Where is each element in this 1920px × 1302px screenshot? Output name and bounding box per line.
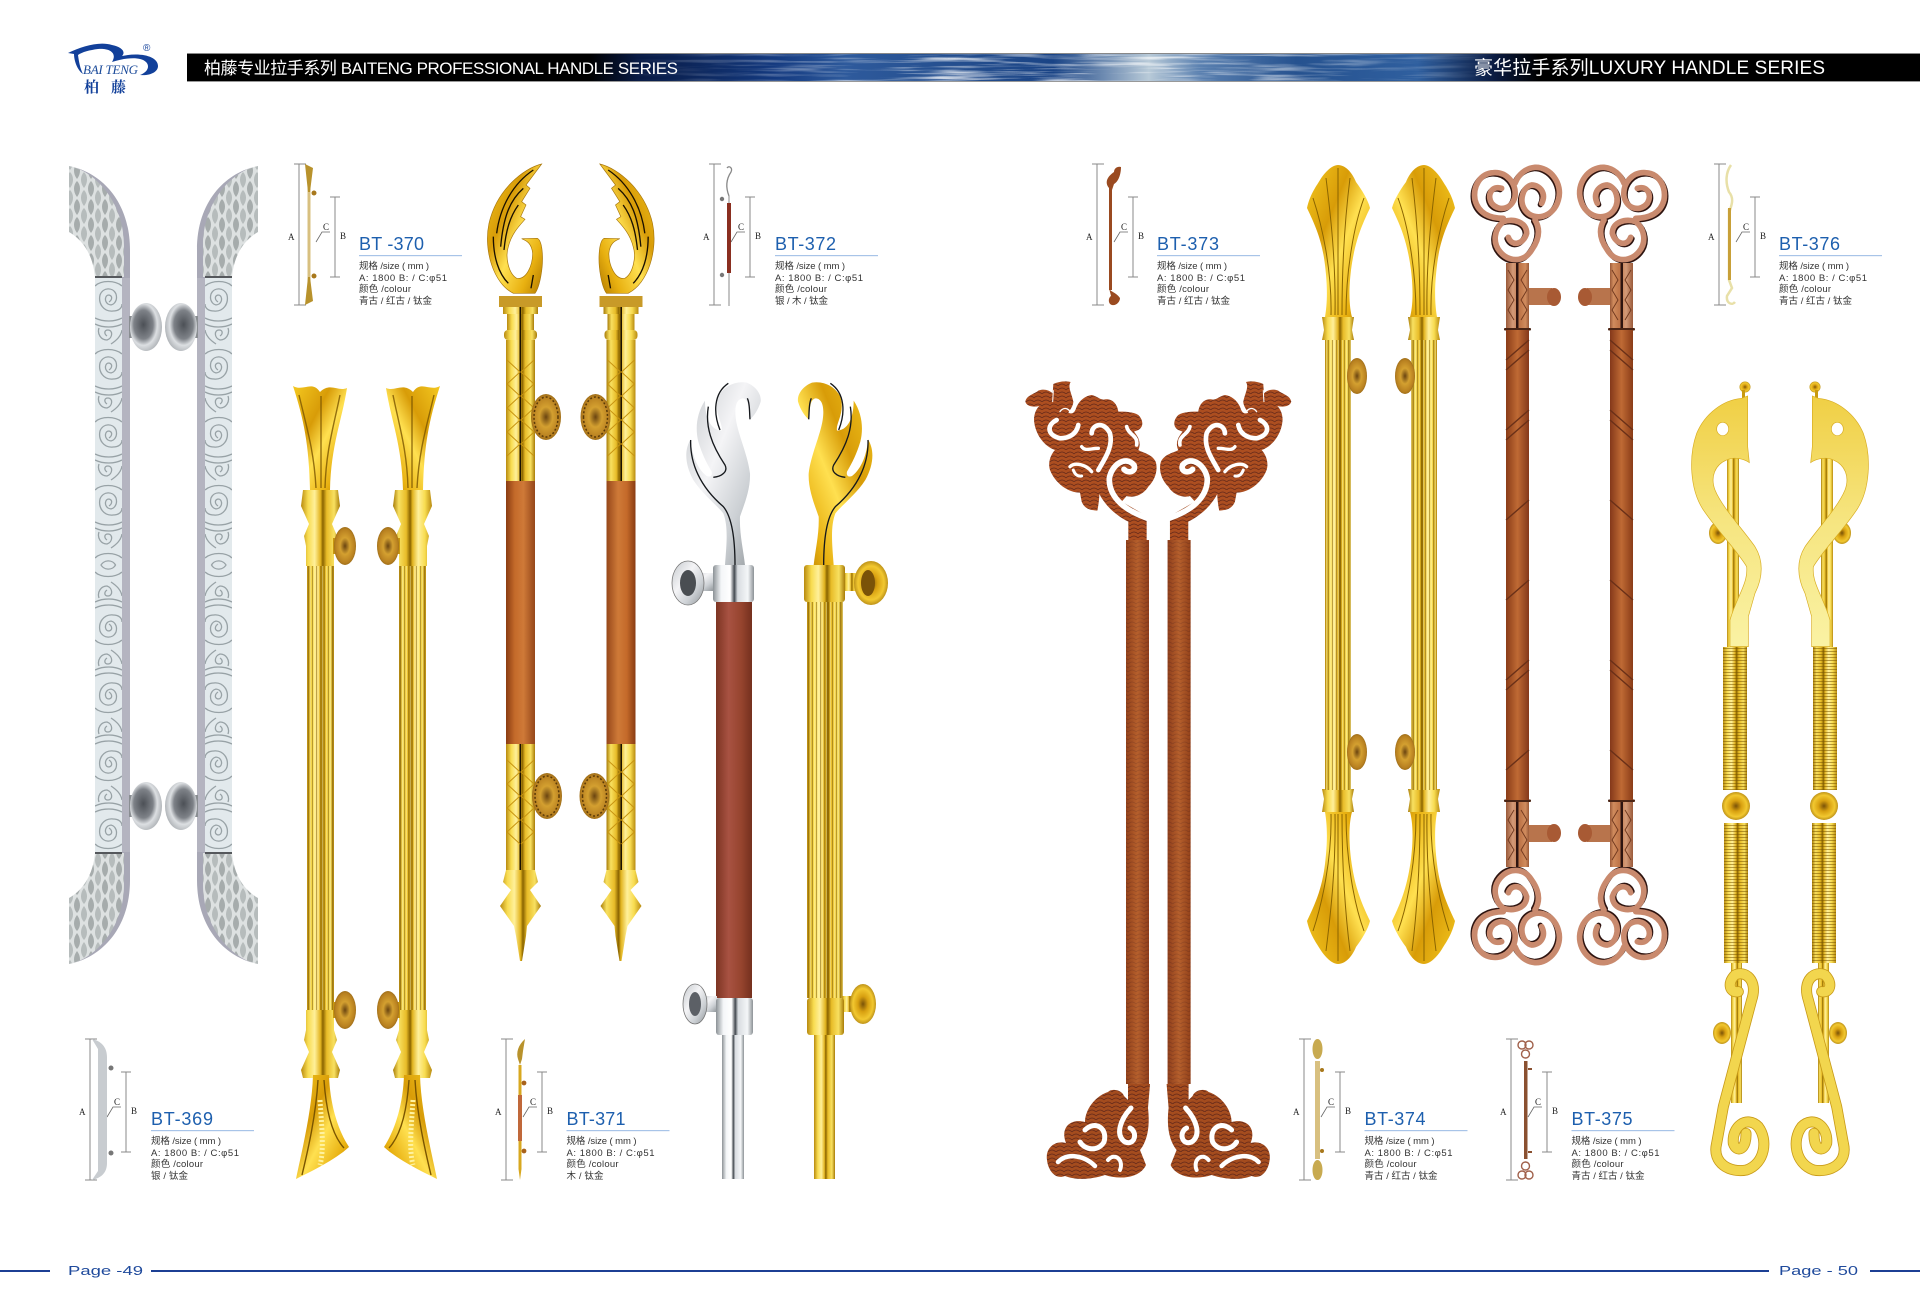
dimension labels: C xyxy=(1328,1097,1334,1107)
specifications: 青古 / 红古 / 钛金 xyxy=(359,295,432,307)
dimension labels: A xyxy=(79,1107,86,1117)
header banner xyxy=(187,53,1920,82)
dimension labels: A xyxy=(1086,232,1093,242)
specifications xyxy=(1779,260,1867,307)
right handle xyxy=(1578,167,1666,963)
dimension labels: A xyxy=(1500,1107,1507,1117)
dimension labels: A xyxy=(1293,1107,1300,1117)
specifications: 规格 /size ( mm ) xyxy=(1364,1135,1434,1147)
model number: BT-376 xyxy=(1779,234,1840,254)
model number: BT -370 xyxy=(359,234,424,254)
specifications: 颜色 /colour xyxy=(566,1158,618,1170)
dimension labels: B xyxy=(1760,231,1766,241)
spec block: BT-374 xyxy=(1293,1039,1468,1182)
specifications: 规格 /size ( mm ) xyxy=(1779,260,1849,272)
specifications: 规格 /size ( mm ) xyxy=(1157,260,1227,272)
right handle xyxy=(1160,381,1291,1179)
handle pair: BT-373 cloud copper xyxy=(1025,381,1291,1179)
mini drawing xyxy=(720,167,732,306)
right handle xyxy=(580,164,654,961)
handle pair: BT-369 silver xyxy=(69,166,258,964)
right handle xyxy=(1796,382,1868,1171)
specifications xyxy=(566,1135,654,1182)
specifications: A: 1800 B: / C:φ51 xyxy=(775,273,863,284)
mini drawing xyxy=(1107,167,1121,305)
model number: BT-374 xyxy=(1364,1109,1426,1129)
specifications: 颜色 /colour xyxy=(151,1158,203,1170)
dimension labels: A xyxy=(1708,232,1715,242)
dimension labels xyxy=(703,222,761,242)
dimension labels: C xyxy=(114,1097,120,1107)
specifications: 青古 / 红古 / 钛金 xyxy=(1364,1170,1438,1182)
dimension labels: A xyxy=(495,1107,502,1117)
page number right: Page - 50 xyxy=(1779,1263,1858,1278)
left handle xyxy=(1025,381,1157,1179)
page number left: Page -49 xyxy=(68,1263,143,1278)
specifications: 颜色 /colour xyxy=(1779,283,1831,295)
specifications: 青古 / 红古 / 钛金 xyxy=(1779,295,1852,307)
dimension labels xyxy=(1086,222,1144,242)
specifications: 规格 /size ( mm ) xyxy=(566,1135,636,1147)
right handle xyxy=(1392,165,1455,964)
specifications xyxy=(775,260,863,307)
dimension labels: C xyxy=(1535,1097,1541,1107)
spec block: BT-369 xyxy=(79,1039,254,1182)
dimension labels: C xyxy=(1743,222,1749,232)
logo: 柏藤 xyxy=(84,76,126,97)
specifications: 规格 /size ( mm ) xyxy=(359,260,429,272)
dimension labels: C xyxy=(323,222,329,232)
dimension labels: B xyxy=(755,231,761,241)
dimension labels: B xyxy=(1138,231,1144,241)
dimension labels: B xyxy=(1345,1106,1351,1116)
specifications: 银 / 钛金 xyxy=(151,1170,188,1182)
specifications: A: 1800 B: / C:φ51 xyxy=(359,273,447,284)
specifications xyxy=(359,260,447,307)
mini drawing xyxy=(517,1039,526,1180)
model number: BT-373 xyxy=(1157,234,1219,254)
right handle xyxy=(165,166,258,964)
spec block: BT-372 xyxy=(703,164,878,307)
footer rule xyxy=(0,1270,1920,1272)
specifications: 青古 / 红古 / 钛金 xyxy=(1157,295,1230,307)
dimension labels xyxy=(1708,222,1766,242)
model number: BT-375 xyxy=(1572,1109,1632,1129)
model number: BT-369 xyxy=(151,1109,213,1129)
dimension labels: B xyxy=(131,1106,137,1116)
handle pair: BT-374 shell gold xyxy=(1307,165,1455,964)
logo: ® xyxy=(143,43,151,54)
mini drawing xyxy=(1518,1041,1533,1179)
handle pair: BT-372 flame silver and gold xyxy=(672,382,888,1179)
left handle xyxy=(293,386,356,1179)
dimension labels xyxy=(79,1097,137,1117)
dimension labels: B xyxy=(547,1106,553,1116)
spec block: BT-373 xyxy=(1086,164,1260,307)
dimension labels xyxy=(1293,1097,1351,1117)
specifications: 颜色 /colour xyxy=(1157,283,1209,295)
dimension labels xyxy=(1500,1097,1558,1117)
specifications: 木 / 钛金 xyxy=(566,1170,604,1182)
dimension labels xyxy=(288,222,346,242)
dimension labels: C xyxy=(1121,222,1127,232)
handle pair: BT-376 serpent gold xyxy=(1692,382,1868,1171)
handle pair: BT-370 gold ribbed xyxy=(293,386,440,1179)
specifications: A: 1800 B: / C:φ51 xyxy=(566,1148,654,1159)
specifications: 颜色 /colour xyxy=(1572,1158,1624,1170)
spec block: BT-371 xyxy=(495,1039,670,1182)
specifications: 青古 / 红古 / 钛金 xyxy=(1572,1170,1645,1182)
model number: BT-372 xyxy=(775,234,836,254)
left handle xyxy=(1692,382,1764,1171)
specifications xyxy=(1364,1135,1452,1182)
specifications xyxy=(151,1135,239,1182)
specifications: 规格 /size ( mm ) xyxy=(151,1135,221,1147)
right handle xyxy=(377,386,440,1179)
specifications: A: 1800 B: / C:φ51 xyxy=(1779,273,1867,284)
spec block: BT-376 xyxy=(1708,164,1882,307)
specifications: 颜色 /colour xyxy=(359,283,411,295)
logo xyxy=(68,43,158,97)
specifications: 银 / 木 / 钛金 xyxy=(775,295,828,307)
dimension labels: A xyxy=(703,232,710,242)
dimension labels: C xyxy=(530,1097,536,1107)
left handle xyxy=(69,166,162,964)
mini drawing xyxy=(92,1039,114,1180)
left handle xyxy=(1473,167,1561,963)
specifications xyxy=(1157,260,1245,307)
model number: BT-371 xyxy=(566,1109,626,1129)
dimension labels: C xyxy=(738,222,744,232)
logo: BAI TENG xyxy=(83,62,139,77)
spec block: BT-370 xyxy=(288,164,462,307)
mini drawing xyxy=(305,164,316,305)
dimension labels xyxy=(495,1097,553,1117)
handle pair: BT-371 wing and wood xyxy=(487,164,654,961)
mini drawing xyxy=(1727,165,1735,304)
dimension labels: B xyxy=(1552,1106,1558,1116)
specifications: 颜色 /colour xyxy=(1364,1158,1416,1170)
left handle xyxy=(487,164,562,961)
specifications: 颜色 /colour xyxy=(775,283,827,295)
specifications: A: 1800 B: / C:φ51 xyxy=(1157,273,1245,284)
specifications: A: 1800 B: / C:φ51 xyxy=(1364,1148,1452,1159)
specifications: 规格 /size ( mm ) xyxy=(1572,1135,1642,1147)
left handle xyxy=(1307,165,1370,964)
left banner title: 柏藤专业拉手系列 BAITENG PROFESSIONAL HANDLE SERIES xyxy=(204,59,678,78)
specifications: A: 1800 B: / C:φ51 xyxy=(151,1148,239,1159)
silver handle xyxy=(672,382,761,1179)
dimension labels: A xyxy=(288,232,295,242)
mini drawing xyxy=(1312,1039,1324,1180)
gold handle xyxy=(798,382,888,1179)
specifications xyxy=(1572,1135,1660,1182)
specifications: A: 1800 B: / C:φ51 xyxy=(1572,1148,1660,1159)
dimension labels: B xyxy=(340,231,346,241)
specifications: 规格 /size ( mm ) xyxy=(775,260,845,272)
handle pair: BT-375 trefoil copper xyxy=(1473,167,1666,963)
spec block: BT-375 xyxy=(1500,1039,1674,1182)
right banner title: 豪华拉手系列LUXURY HANDLE SERIES xyxy=(1474,57,1825,79)
